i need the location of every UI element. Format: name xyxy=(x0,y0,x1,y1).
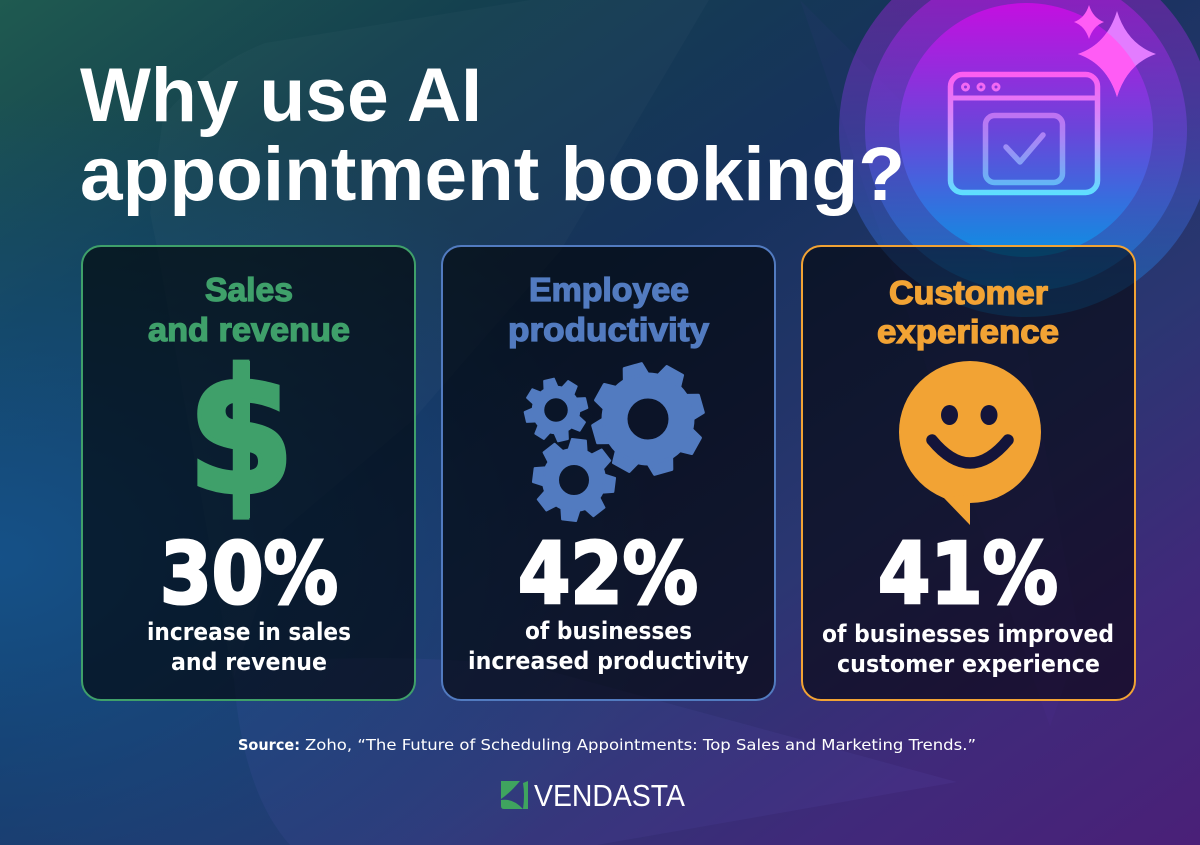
icon: browser window with checkmark xyxy=(950,74,1098,192)
source citation: Source: xyxy=(238,736,300,754)
decorative orb xyxy=(839,0,1200,317)
heading: sales and revenue: and revenue xyxy=(148,311,350,348)
stat: 30%: 30% xyxy=(160,525,338,624)
title: Why use AI xyxy=(80,53,482,138)
description: sales: and revenue xyxy=(171,648,327,676)
panel: employee productivity xyxy=(442,246,775,700)
logo: Vendasta: VENDASTA xyxy=(534,778,685,813)
stat: 42%: 42% xyxy=(518,525,698,624)
icon: smiley speech bubble xyxy=(899,361,1041,525)
description: customer experience xyxy=(822,620,1114,678)
stat: 41%: 41% xyxy=(878,525,1058,624)
icon: dollar sign: $ xyxy=(187,334,295,533)
title: appointment booking? xyxy=(80,132,905,217)
icon: gears xyxy=(524,363,704,521)
heading: customer experience: experience xyxy=(877,313,1059,350)
heading: sales and revenue xyxy=(148,271,350,348)
heading: customer experience: Customer xyxy=(889,274,1048,311)
panel: sales and revenue xyxy=(82,246,415,700)
icon: sparkles xyxy=(1074,5,1156,97)
panel: customer experience xyxy=(802,246,1135,700)
description: sales xyxy=(147,618,351,676)
heading: employee productivity: productivity xyxy=(508,311,710,348)
description: productivity: of businesses xyxy=(525,617,692,645)
source citation: Zoho, “The Future of Scheduling Appointments: Top Sales and Marketing Trends.” xyxy=(305,736,976,754)
heading: employee productivity xyxy=(508,271,710,348)
description: productivity xyxy=(468,617,749,675)
title xyxy=(80,53,905,217)
description: sales: increase in sales xyxy=(147,618,351,646)
description: customer experience: customer experience xyxy=(837,650,1100,678)
heading: sales and revenue: Sales xyxy=(205,271,293,308)
heading: employee productivity: Employee xyxy=(529,271,689,308)
description: customer experience: of businesses improved xyxy=(822,620,1114,648)
heading: customer experience xyxy=(877,274,1059,350)
description: productivity: increased productivity xyxy=(468,647,749,675)
